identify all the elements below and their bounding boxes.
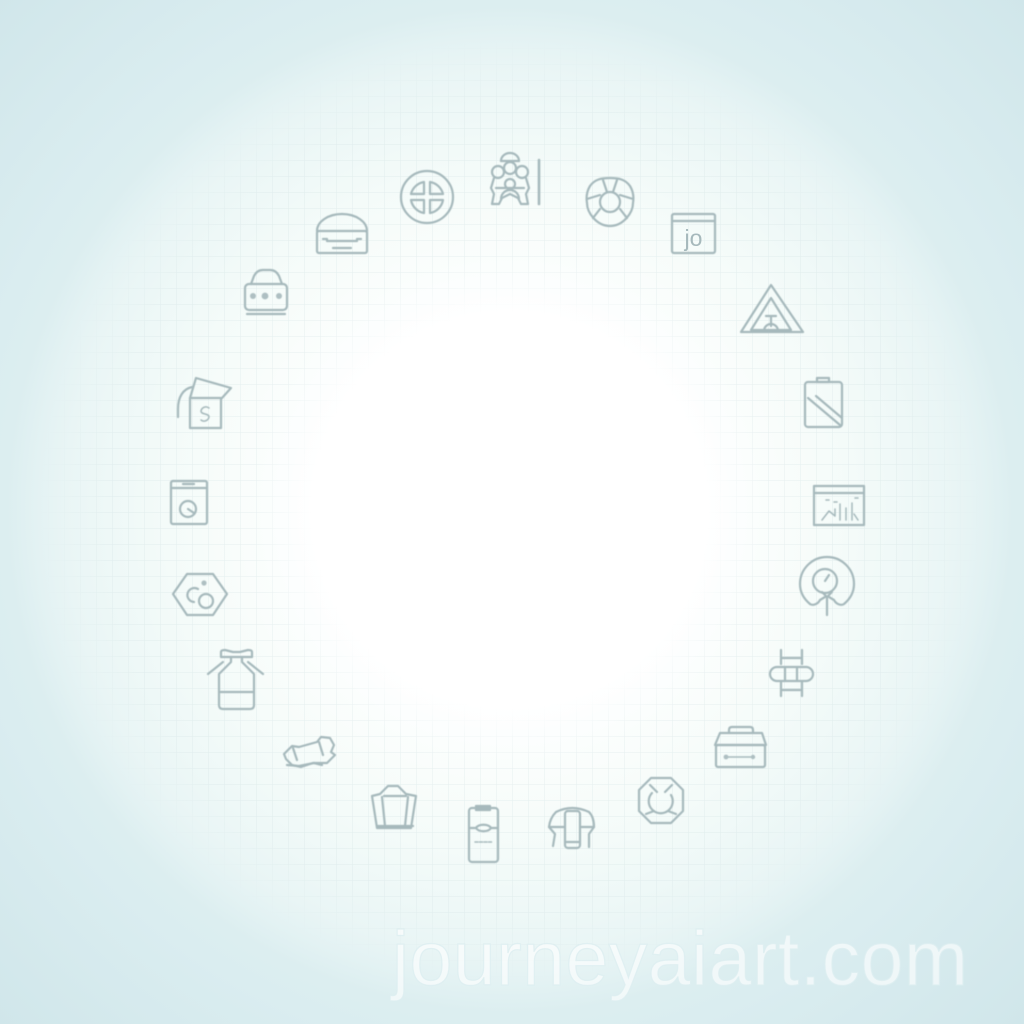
icon: ring bbox=[587, 178, 633, 226]
watermark: journeyaiart.com bbox=[390, 916, 968, 1002]
icon: beetle with bar bbox=[491, 153, 539, 204]
icon: hexagon bbox=[173, 574, 227, 615]
icon: octagon dial bbox=[639, 778, 683, 823]
icon: browser window with jo bbox=[672, 214, 715, 253]
icon: robot bbox=[549, 808, 594, 848]
icon: ladder pill bbox=[770, 650, 813, 696]
icon: gauge arch bbox=[800, 557, 854, 615]
icon: wrench pair bbox=[284, 737, 335, 767]
icon: battery clipboard bbox=[805, 378, 842, 427]
icon: basket bbox=[372, 786, 416, 828]
icon: chart window bbox=[814, 486, 864, 525]
background grid bbox=[81, 81, 939, 939]
icon: toolbox bbox=[715, 727, 766, 767]
icon: dome case bbox=[317, 214, 367, 253]
icon: warning triangle bbox=[741, 285, 803, 332]
icon: jug with cord bbox=[178, 378, 231, 428]
icon: washing machine bbox=[171, 481, 207, 524]
icon: toaster bbox=[245, 270, 287, 314]
icon: browser window with jo: jo bbox=[684, 225, 702, 251]
icon: jar bbox=[208, 650, 263, 709]
icon: phone clipboard bbox=[469, 806, 498, 862]
icon: circle with cross bbox=[401, 171, 453, 223]
